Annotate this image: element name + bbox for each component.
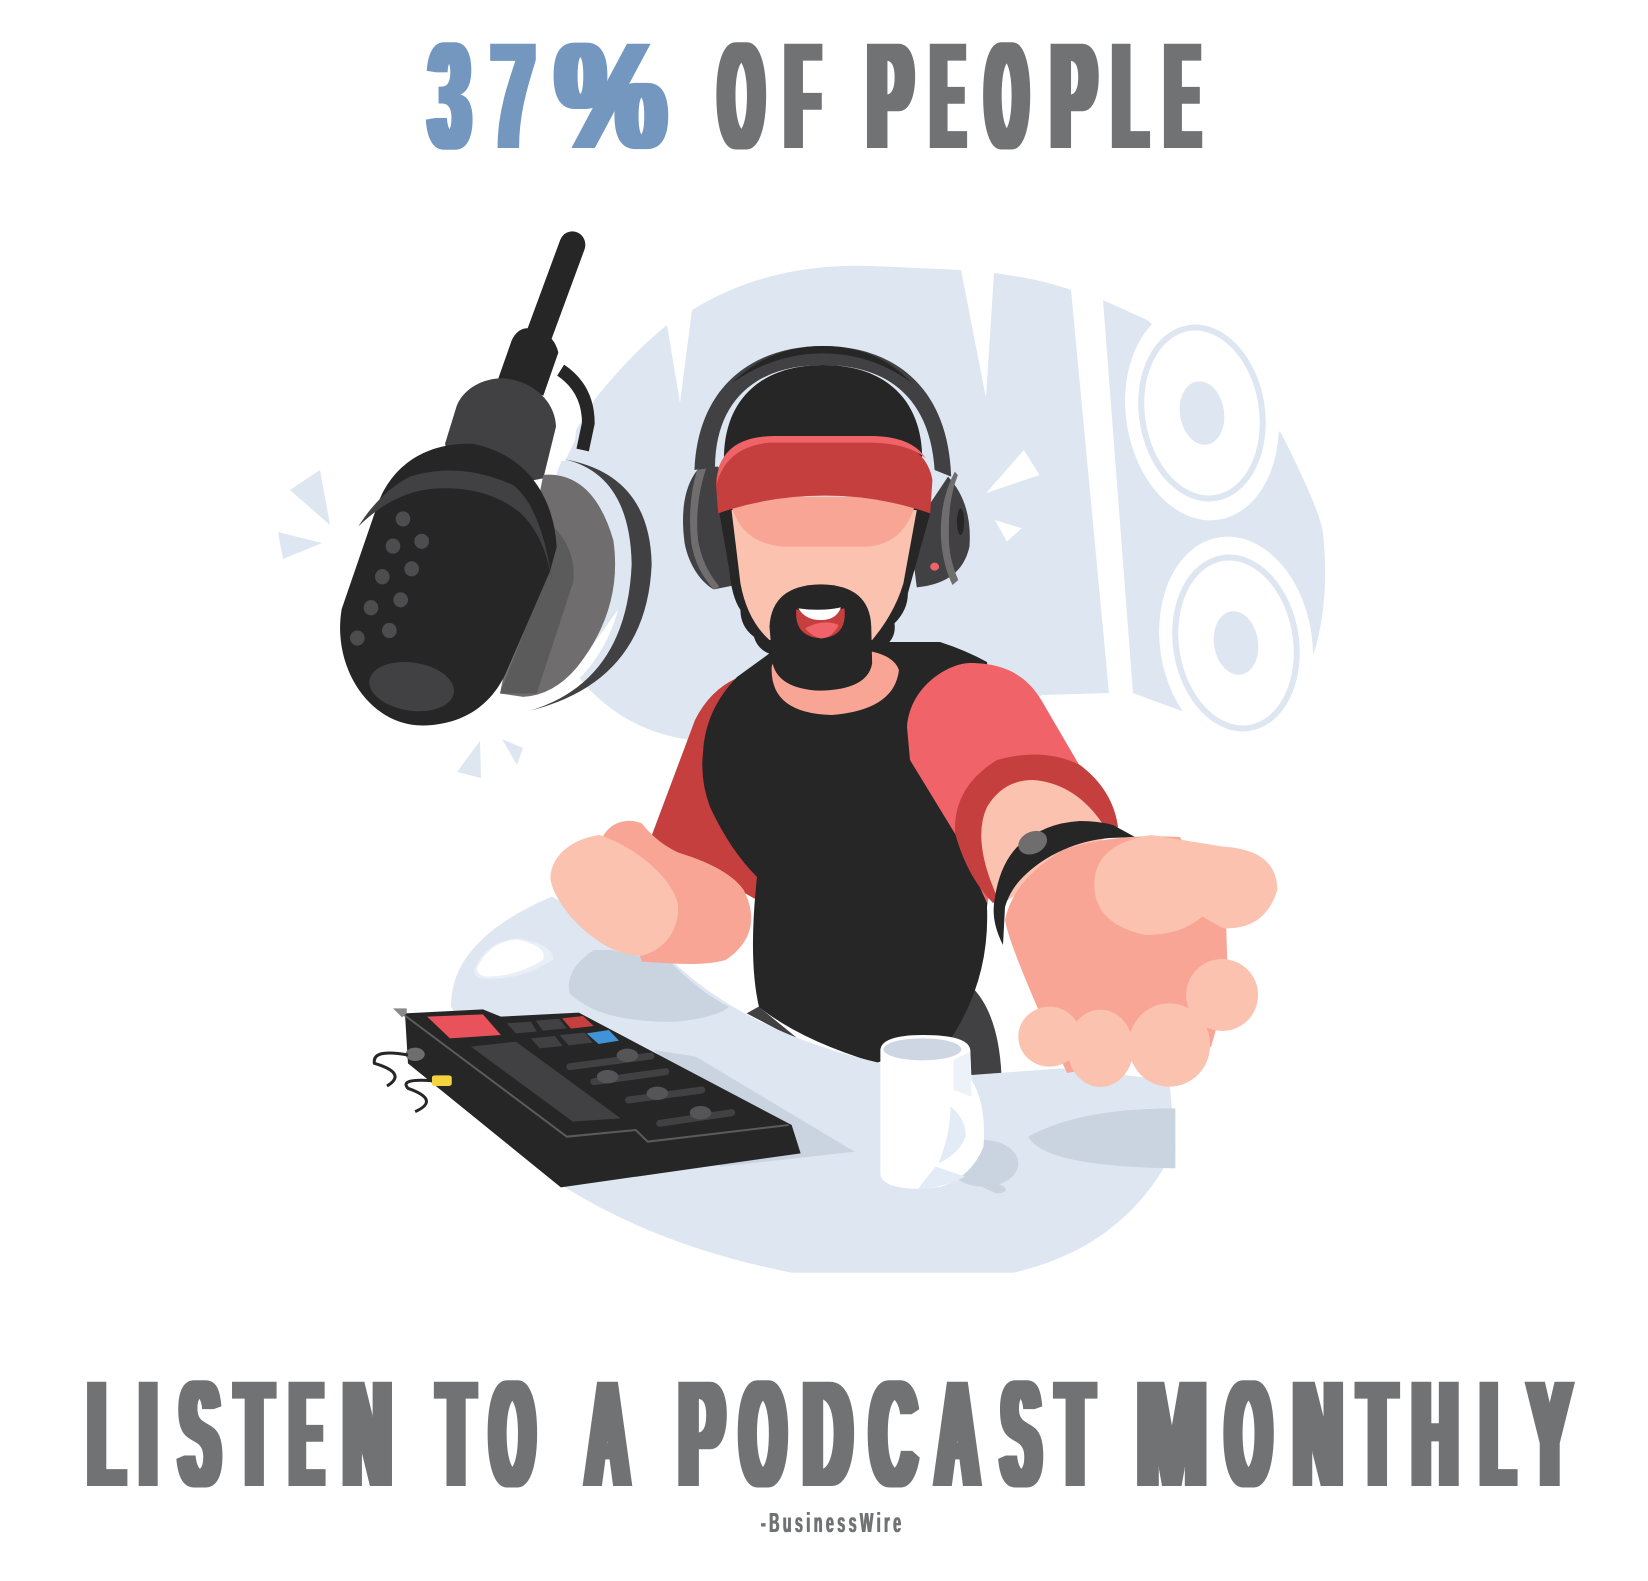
title: 37% of people: F	[786, 12, 819, 181]
red visor	[716, 436, 932, 513]
subtitle: listen to a podcast monthly: T	[1359, 1350, 1395, 1519]
mouth	[796, 607, 845, 638]
right sleeve	[907, 663, 1118, 903]
icon: blue sound sparks around microphone	[278, 470, 523, 778]
subtitle: listen to a podcast monthly: H	[1413, 1350, 1457, 1519]
title: 37% of people: 7	[492, 12, 534, 181]
subtitle: listen to a podcast monthly: E	[291, 1350, 322, 1519]
title: 37% of people: P	[1052, 12, 1096, 181]
subtitle: listen to a podcast monthly	[89, 1350, 1571, 1519]
icon: chair	[747, 987, 1001, 1075]
subtitle: listen to a podcast monthly: T	[237, 1350, 272, 1519]
neck	[772, 652, 899, 715]
title: 37% of people: P	[868, 12, 912, 181]
title: 37% of people: %	[556, 12, 666, 181]
left sleeve	[650, 678, 757, 900]
subtitle: listen to a podcast monthly: L	[89, 1350, 124, 1519]
icon: upper speaker	[1110, 294, 1294, 532]
subtitle: listen to a podcast monthly: T	[1058, 1350, 1093, 1519]
title: 37% of people	[430, 12, 1199, 181]
icon: white sound sparks	[986, 450, 1040, 542]
beard	[769, 584, 872, 691]
subtitle: listen to a podcast monthly: N	[1294, 1350, 1342, 1519]
infographic canvas: E	[1166, 12, 1199, 181]
title: 37% of people: O	[986, 12, 1027, 181]
right arm, wristband and open hand	[981, 780, 1277, 1087]
subtitle: listen to a podcast monthly: M	[1137, 1350, 1207, 1519]
right ear cup	[908, 472, 970, 587]
icon: coffee mug	[880, 1035, 984, 1189]
podcaster head with headphones	[683, 346, 970, 715]
infographic canvas: Y	[1529, 1350, 1571, 1519]
subtitle: listen to a podcast monthly: A	[587, 1350, 628, 1519]
subtitle: listen to a podcast monthly: A	[937, 1350, 978, 1519]
title: 37% of people: 3	[430, 12, 470, 181]
visor shadow	[732, 497, 915, 547]
icon: mixing console	[374, 1008, 801, 1187]
icon: mouse pebble	[474, 938, 553, 979]
left ear cup	[683, 467, 736, 589]
icon: microphone	[340, 245, 652, 726]
face	[732, 510, 917, 640]
torso: black t-shirt	[702, 642, 1000, 1063]
subtitle: listen to a podcast monthly: N	[344, 1350, 391, 1519]
sideburns and jaw hair	[719, 507, 930, 655]
hair	[724, 365, 922, 457]
title: 37% of people: L	[1114, 12, 1146, 181]
illustration background: studio blob with speakers	[543, 266, 1328, 761]
subtitle: listen to a podcast monthly: S	[1002, 1350, 1040, 1519]
source credit: -BusinessWire	[761, 1507, 901, 1538]
subtitle: listen to a podcast monthly: O	[741, 1350, 785, 1519]
title: 37% of people: O	[720, 12, 763, 181]
subtitle: listen to a podcast monthly: O	[1226, 1350, 1271, 1519]
subtitle: listen to a podcast monthly: T	[439, 1350, 474, 1519]
subtitle: listen to a podcast monthly: I	[140, 1350, 156, 1519]
subtitle: listen to a podcast monthly: C	[871, 1350, 916, 1519]
subtitle: listen to a podcast monthly: S	[180, 1350, 219, 1519]
icon: lower speaker	[1144, 525, 1328, 761]
subtitle: listen to a podcast monthly: L	[1482, 1350, 1514, 1519]
subtitle: listen to a podcast monthly: D	[804, 1350, 851, 1519]
subtitle: listen to a podcast monthly: P	[679, 1350, 724, 1519]
headphone band	[694, 346, 951, 477]
title: 37% of people: E	[932, 12, 963, 181]
left arm and hand	[551, 821, 751, 964]
subtitle: listen to a podcast monthly: O	[491, 1350, 534, 1519]
desk with shadows	[451, 897, 1175, 1273]
